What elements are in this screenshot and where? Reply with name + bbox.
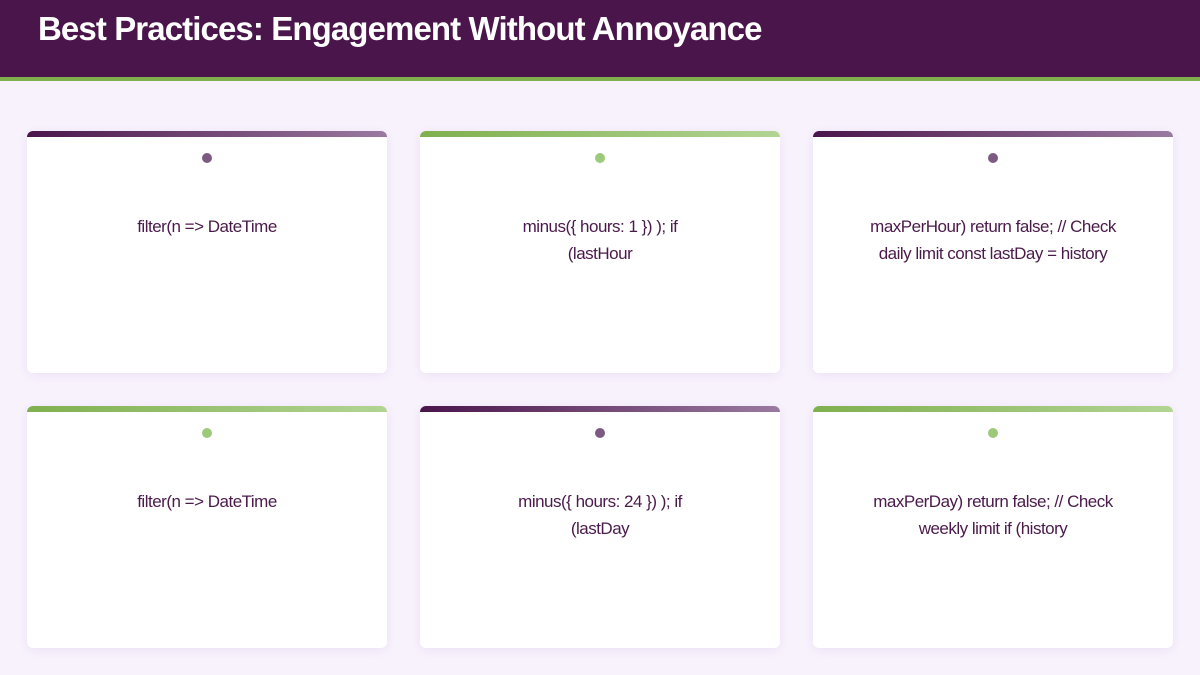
card 2 (420, 131, 780, 373)
dot icon (595, 428, 605, 438)
card text: maxPerHour) return false; // Check (870, 217, 1116, 236)
card text: (lastDay (571, 519, 629, 538)
card text (873, 492, 1114, 538)
header (0, 0, 1200, 81)
card text (518, 492, 682, 538)
title: Best Practices: Engagement Without Annoyance (38, 10, 762, 47)
card 4 (27, 406, 387, 648)
card 1 (27, 131, 387, 373)
card 5 (420, 406, 780, 648)
dot icon (202, 153, 212, 163)
card text: (lastHour (568, 244, 632, 263)
card text: maxPerDay) return false; // Check (873, 492, 1113, 511)
card 6 (813, 406, 1173, 648)
card text: filter(n => DateTime (137, 492, 277, 511)
card 3 (813, 131, 1173, 373)
dot icon (988, 428, 998, 438)
card text: minus({ hours: 1 }) ); if (523, 217, 677, 236)
card text: daily limit const lastDay = history (879, 244, 1107, 263)
dot icon (202, 428, 212, 438)
card text (523, 217, 678, 263)
dot icon (988, 153, 998, 163)
card text: minus({ hours: 24 }) ); if (518, 492, 682, 511)
card text: filter(n => DateTime (137, 217, 277, 236)
card text (870, 217, 1116, 263)
dot icon (595, 153, 605, 163)
card text: weekly limit if (history (919, 519, 1067, 538)
